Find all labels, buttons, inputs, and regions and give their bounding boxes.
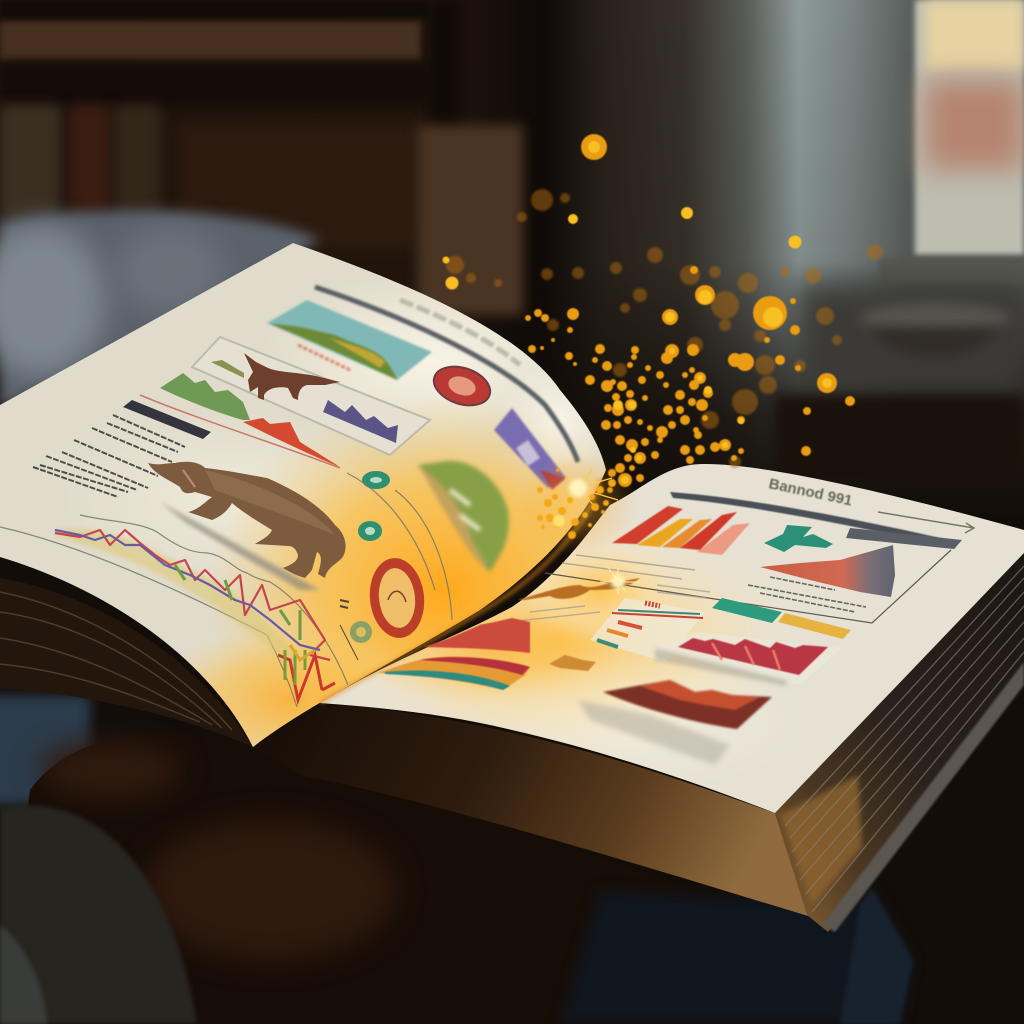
line chart: yellow band (55, 529, 300, 665)
mid sparks (525, 134, 855, 493)
red peak (243, 418, 340, 467)
front page block (255, 705, 808, 916)
panel: right page (310, 455, 1024, 820)
stripes text (562, 555, 695, 579)
animal shadow (160, 502, 320, 590)
book (0, 240, 1024, 932)
warm glow near spine (518, 455, 638, 555)
arrow line (878, 512, 974, 533)
red rule (140, 395, 340, 468)
line chart (55, 530, 330, 660)
green circle icons (350, 471, 390, 643)
header rule (315, 287, 578, 462)
left page block (0, 578, 253, 747)
text block (33, 415, 185, 497)
dark label (123, 400, 211, 439)
gray blurred text block (578, 700, 730, 765)
dark label bar (846, 528, 962, 549)
left page edge lines (0, 592, 232, 730)
red area chart (424, 618, 530, 653)
small text lines (480, 585, 710, 625)
right cover strip (822, 662, 1024, 932)
bar chart (655, 632, 842, 685)
animal chart panel (192, 337, 430, 455)
header rule with arrow (670, 492, 958, 548)
multi-colour chart corner (278, 645, 335, 700)
bowl on window sill (859, 302, 1011, 357)
yellow label (778, 613, 851, 639)
animal illustration (148, 462, 346, 578)
page title: Bannod 991 (767, 475, 854, 510)
red stripes chart (612, 506, 750, 555)
panel: left page (0, 243, 606, 747)
window (775, 0, 1024, 485)
gold page block corner (780, 775, 862, 905)
right page edge lines (785, 566, 1024, 912)
area chart (160, 373, 250, 420)
small star on right page (600, 566, 640, 594)
dial side text (340, 600, 358, 660)
golden sparks (442, 134, 883, 594)
small colour chart (549, 655, 596, 671)
small bars card (590, 598, 705, 662)
central starburst (537, 468, 618, 539)
red badge (432, 366, 492, 406)
thin rules around chart (0, 473, 452, 707)
hands and lap (0, 733, 913, 1024)
red mountain chart (603, 680, 772, 729)
red ring dial (370, 558, 424, 638)
green leaf illustration (418, 461, 509, 572)
gray text under bars (655, 648, 787, 686)
triangle chart panel (545, 545, 951, 623)
page spine shadow (320, 478, 600, 703)
purple card (494, 408, 566, 490)
teal label (712, 598, 782, 623)
dim background bokeh (446, 189, 883, 468)
sofa cushion (0, 211, 320, 805)
rainbow area chart (378, 657, 530, 690)
spark chart small (518, 578, 640, 600)
teal arrow icon (764, 525, 833, 552)
right page block (775, 553, 1024, 932)
bright sparks (442, 141, 832, 484)
landscape picture (267, 300, 432, 380)
